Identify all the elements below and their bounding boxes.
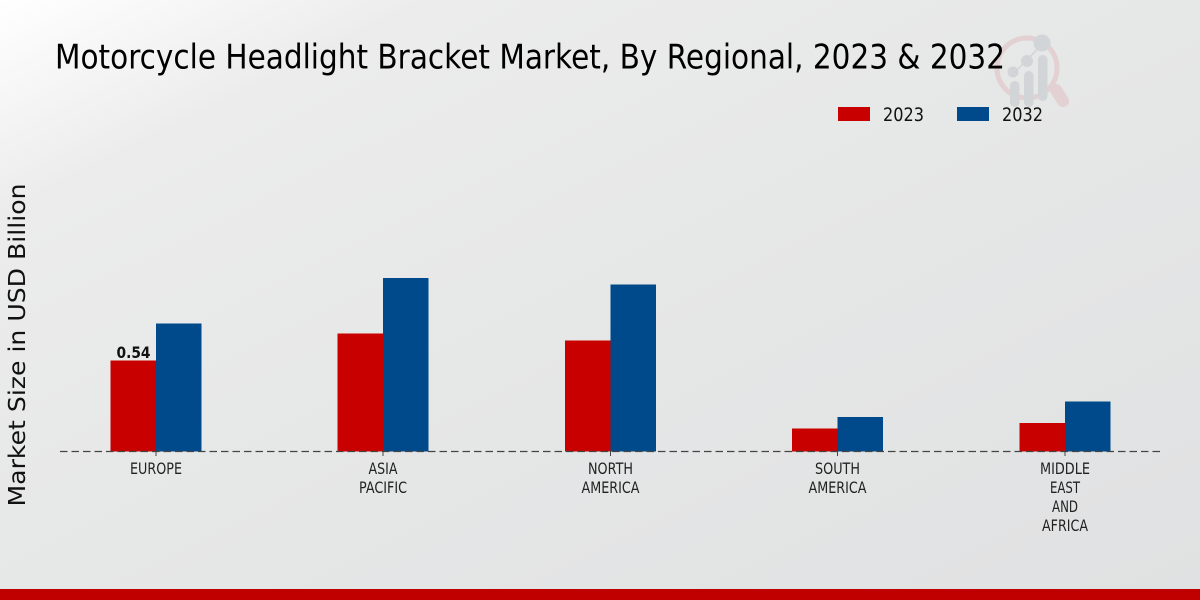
label: Middle East and Africa: MIDDLE	[1040, 459, 1090, 478]
bars: Europe	[110, 324, 202, 452]
label: North America	[582, 459, 640, 497]
label: South America: AMERICA	[808, 478, 867, 497]
legend item: 2023: 2023	[883, 105, 924, 126]
label: Middle East and Africa: AFRICA	[1042, 516, 1088, 535]
label: North America: NORTH	[588, 459, 633, 478]
label: South America: SOUTH	[815, 459, 860, 478]
label: Middle East and Africa: AND	[1052, 497, 1078, 516]
footer bar	[0, 589, 1200, 600]
label: Asia Pacific: ASIA	[368, 459, 398, 478]
bars: Asia Pacific	[338, 278, 428, 452]
label: Middle East and Africa	[1040, 459, 1090, 535]
label: North America: AMERICA	[582, 478, 640, 497]
bars: South America	[792, 417, 883, 452]
legend	[838, 105, 1043, 126]
label: South America	[808, 459, 867, 497]
baseline axis	[60, 450, 1160, 452]
legend item: 2032: 2032	[1002, 105, 1043, 126]
label: Asia Pacific: PACIFIC	[359, 478, 407, 497]
legend item: 2032	[957, 105, 1043, 126]
bar chart	[60, 278, 1160, 535]
y axis label: Market Size in USD Billion	[5, 184, 31, 506]
data label: 0.54: 0.54	[116, 343, 150, 362]
bars: Middle East and Africa	[1020, 402, 1110, 452]
title: Motorcycle Headlight Bracket Market, By Regional, 2023 & 2032	[55, 38, 1005, 78]
bars: North America	[565, 284, 656, 452]
label: Asia Pacific	[359, 459, 407, 497]
legend item: 2023	[838, 105, 924, 126]
icon: watermark logo magnifier with bars	[997, 34, 1063, 107]
label: Europe: EUROPE	[130, 459, 182, 478]
label: Middle East and Africa: EAST	[1050, 478, 1080, 497]
category labels	[130, 459, 1090, 535]
